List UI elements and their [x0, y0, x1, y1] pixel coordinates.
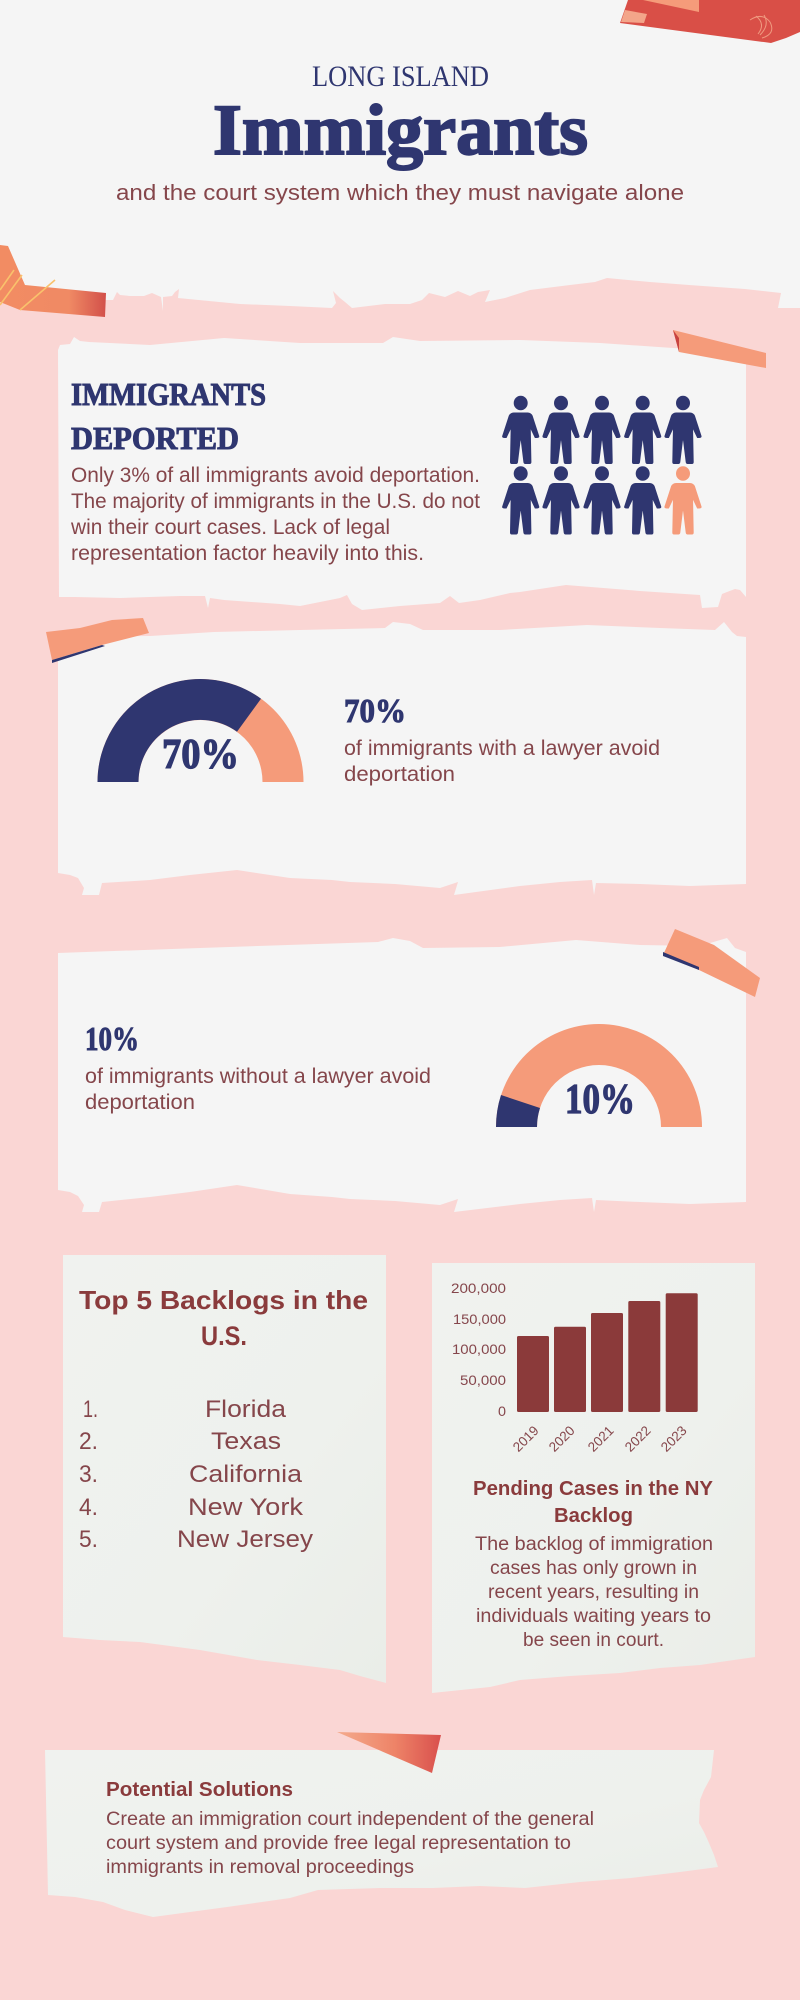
list: top 5 states: [79, 1396, 313, 1553]
tape: panel 3 corner: [663, 929, 760, 997]
tape: left: [0, 245, 106, 317]
tape: panel 1 corner: [673, 330, 766, 368]
heading: pending cases: [473, 1478, 714, 1527]
chart: gauge 70 percent: [98, 679, 304, 782]
panel: top 5 backlogs: [63, 1255, 386, 1683]
axis labels: 200,000: [451, 1280, 506, 1296]
bars: [517, 1293, 698, 1412]
list: top 5 states: New York: [188, 1494, 304, 1521]
heading: pending cases: Pending Cases in the NY: [473, 1478, 714, 1500]
text: with a lawyer: [344, 737, 660, 786]
list: top 5 states: California: [189, 1461, 303, 1488]
text: solutions body: immigrants in removal proceedings: [106, 1856, 414, 1878]
panel: 10 percent without a lawyer: [58, 929, 760, 1212]
panel: immigrants deported: [58, 330, 766, 610]
title block: [116, 60, 684, 205]
tape: panel 2 corner: [46, 618, 149, 663]
list: top 5 states: Texas: [211, 1428, 281, 1455]
axis labels: 0: [498, 1403, 506, 1419]
axis labels: [451, 1280, 506, 1419]
text: backlog description: The backlog of immigration: [475, 1534, 713, 1555]
year labels: 2019: [510, 1423, 542, 1455]
axis labels: 150,000: [453, 1311, 506, 1327]
text: solutions body: Create an immigration court independent of the general: [106, 1808, 594, 1830]
icon: people pictogram, nine of ten navy: [503, 396, 701, 534]
axis labels: 50,000: [460, 1372, 506, 1388]
heading: pending cases: Backlog: [554, 1505, 633, 1527]
text: with a lawyer: of immigrants with a lawyer avoid: [344, 737, 660, 760]
stat: 10 percent: 10%: [85, 1021, 139, 1058]
text: backlog description: cases has only grown in: [490, 1558, 697, 1579]
text: backlog description: [475, 1534, 713, 1651]
heading: immigrants deported: IMMIGRANTS: [71, 376, 266, 412]
panel 3 torn paper: [58, 938, 746, 1212]
heading: immigrants deported: [71, 376, 266, 456]
text: deportation statement: representation factor heavily into this.: [71, 542, 424, 565]
list: top 5 states: Florida: [205, 1396, 287, 1423]
text: without a lawyer: [85, 1065, 431, 1114]
heading: top 5 backlogs: U.S.: [201, 1321, 247, 1351]
year labels: 2020: [546, 1423, 578, 1455]
title: Long Island: LONG ISLAND: [312, 60, 489, 93]
torn paper strip: [45, 1750, 718, 1917]
chart: gauge 10 percent: 10%: [565, 1077, 635, 1123]
panel: 70 percent with a lawyer: [46, 618, 746, 895]
bar chart: pending cases 2019-2023: [451, 1280, 698, 1455]
stat: 70 percent: 70%: [344, 693, 406, 730]
text: without a lawyer: of immigrants without a lawyer avoid: [85, 1065, 431, 1088]
text: with a lawyer: deportation: [344, 763, 455, 786]
list: top 5 states: 1.: [83, 1396, 98, 1423]
list: top 5 states: 5.: [79, 1526, 98, 1553]
panel: pending cases: [432, 1263, 755, 1693]
list: top 5 states: 4.: [79, 1494, 98, 1521]
text: without a lawyer: deportation: [85, 1091, 195, 1114]
title: Immigrants: Immigrants: [213, 90, 588, 170]
header torn paper panel: [0, 0, 800, 311]
axis labels: 100,000: [452, 1341, 506, 1357]
panel: potential solutions: [45, 1732, 718, 1917]
paper sheet left: [63, 1255, 386, 1683]
text: solutions body: [106, 1808, 594, 1878]
list: top 5 states: New Jersey: [177, 1526, 313, 1553]
tape: top right: [620, 0, 800, 43]
heading: top 5 backlogs: [79, 1285, 368, 1351]
text: backlog description: individuals waiting years to: [476, 1606, 711, 1627]
text: backlog description: recent years, resulting in: [488, 1582, 699, 1603]
paper sheet right: [432, 1263, 755, 1693]
chart: gauge 10 percent: [496, 1024, 702, 1127]
heading: immigrants deported: DEPORTED: [71, 420, 239, 456]
text: deportation statement: [70, 464, 480, 565]
list: top 5 states: 3.: [79, 1461, 98, 1488]
chart: gauge 70 percent: 70%: [162, 732, 239, 778]
text: deportation statement: win their court cases. Lack of legal: [70, 516, 390, 539]
year labels: 2021: [585, 1423, 617, 1455]
panel 2 torn paper: [58, 622, 746, 895]
year labels: 2023: [658, 1423, 690, 1455]
text: solutions body: court system and provide free legal representation to: [106, 1832, 571, 1854]
tape: bottom panel: [337, 1732, 441, 1773]
list: top 5 states: 2.: [79, 1428, 98, 1455]
subtitle: and the court system which they must navigate alone: [116, 180, 684, 205]
year labels: 2022: [622, 1423, 654, 1455]
panel 1 torn paper: [58, 337, 746, 610]
text: deportation statement: Only 3% of all immigrants avoid deportation.: [71, 464, 480, 487]
year labels: [510, 1423, 690, 1455]
text: deportation statement: The majority of immigrants in the U.S. do not: [71, 490, 480, 513]
heading: top 5 backlogs: Top 5 Backlogs in the: [79, 1285, 368, 1315]
heading: potential solutions: Potential Solutions: [106, 1779, 293, 1801]
text: backlog description: be seen in court.: [523, 1630, 664, 1651]
